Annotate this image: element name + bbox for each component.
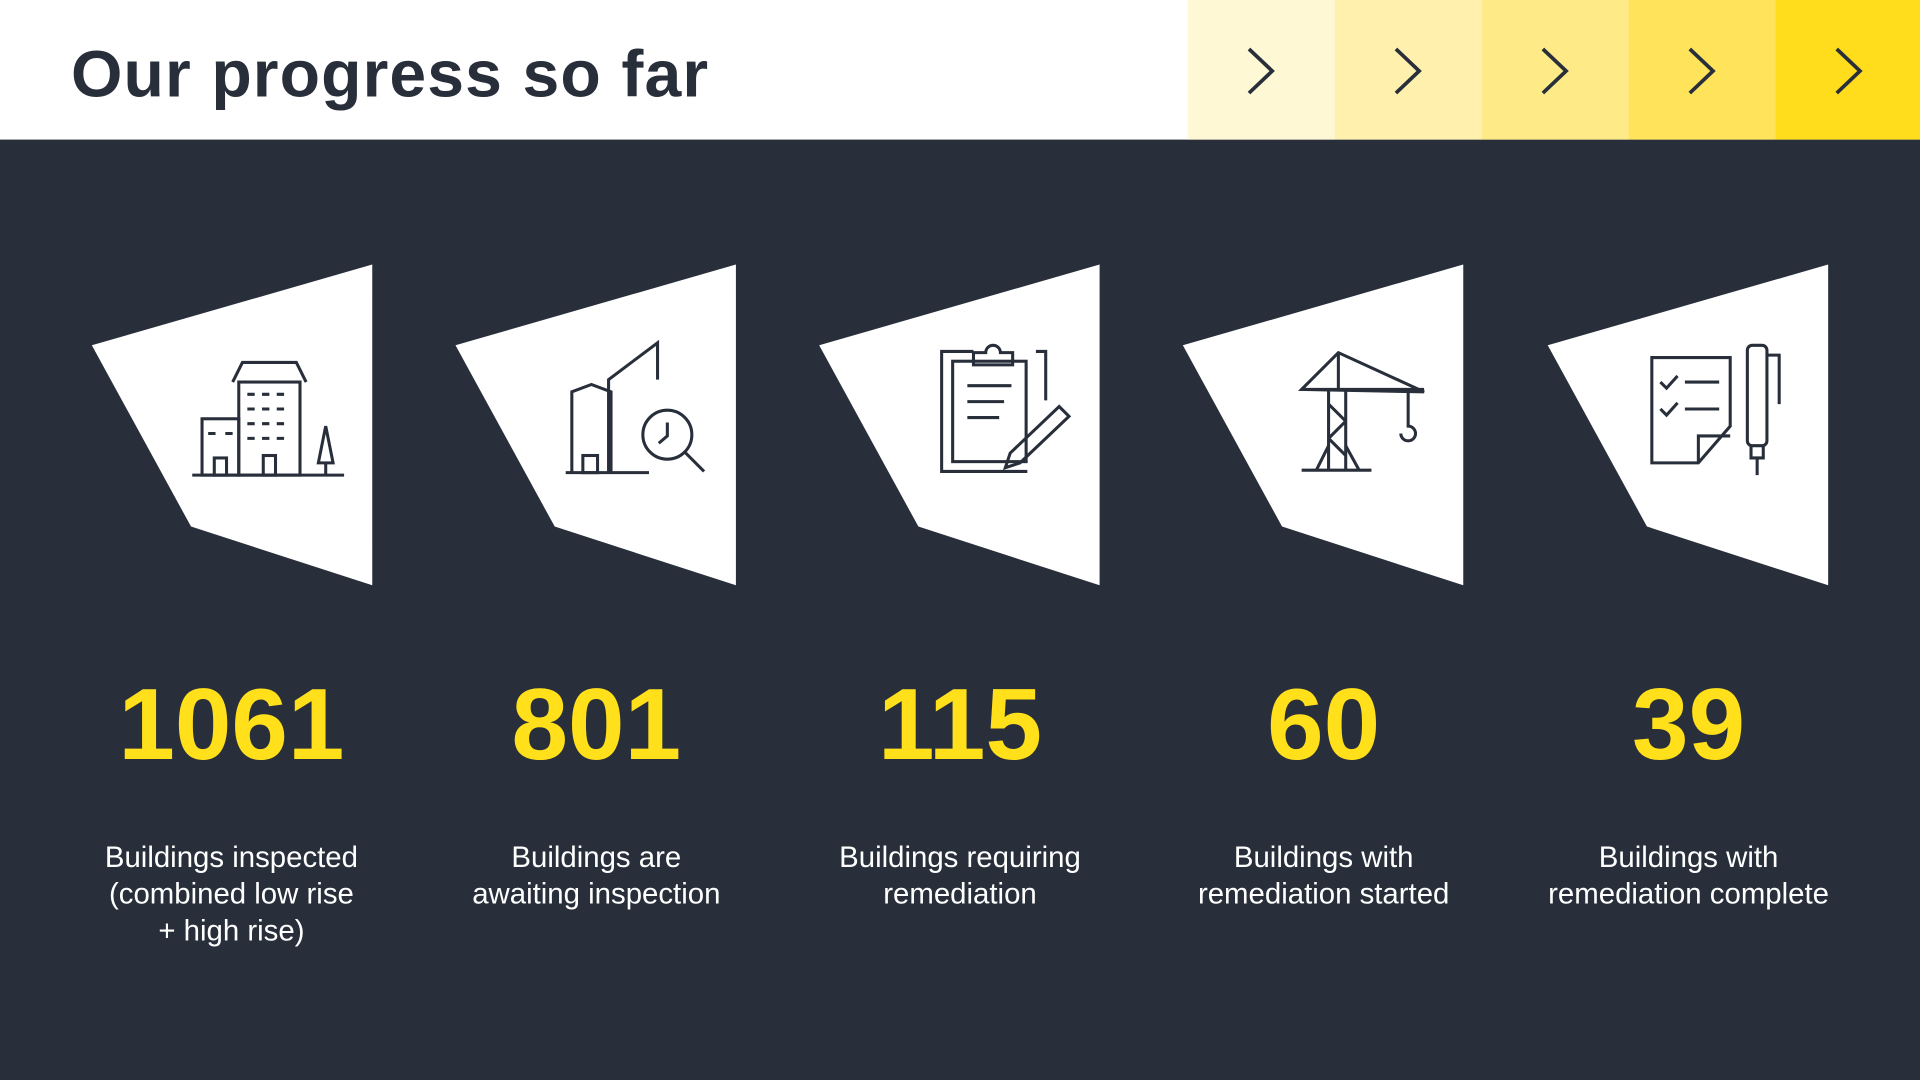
- label: Buildings with: [1234, 841, 1413, 874]
- panel: buildings inspected: + high rise): [158, 914, 304, 947]
- number: 1061: [118, 667, 344, 781]
- panel: remediation started: remediation started: [1198, 878, 1449, 911]
- icon: clipboard with pen: [942, 345, 1069, 471]
- title: Our progress so far: [71, 38, 709, 112]
- progress arrows: [1188, 0, 1920, 140]
- label: Buildings inspected: [105, 841, 358, 874]
- panel: remediation complete: [1548, 264, 1829, 911]
- panel: awaiting inspection: [456, 264, 736, 911]
- header band: [0, 0, 1920, 140]
- label: Buildings requiring: [839, 841, 1081, 874]
- panel: buildings inspected: [92, 264, 372, 947]
- icon: checklist and pen: [1652, 345, 1779, 475]
- panel: requiring remediation: [819, 264, 1100, 911]
- icon: building with magnifier: [566, 343, 704, 473]
- panel: requiring remediation: remediation: [883, 878, 1037, 911]
- label: Buildings are: [511, 841, 681, 874]
- icon: buildings: [192, 362, 344, 475]
- number: 115: [878, 667, 1042, 781]
- label: Buildings with: [1599, 841, 1778, 874]
- number: 801: [512, 667, 681, 781]
- panel: remediation complete: remediation complete: [1548, 878, 1829, 911]
- number: 60: [1267, 667, 1380, 781]
- number: 39: [1632, 667, 1745, 781]
- panel: remediation started: [1183, 264, 1463, 911]
- panel: awaiting inspection: awaiting inspection: [472, 878, 720, 911]
- icon: crane: [1302, 353, 1424, 470]
- panel: buildings inspected: (combined low rise: [109, 878, 354, 911]
